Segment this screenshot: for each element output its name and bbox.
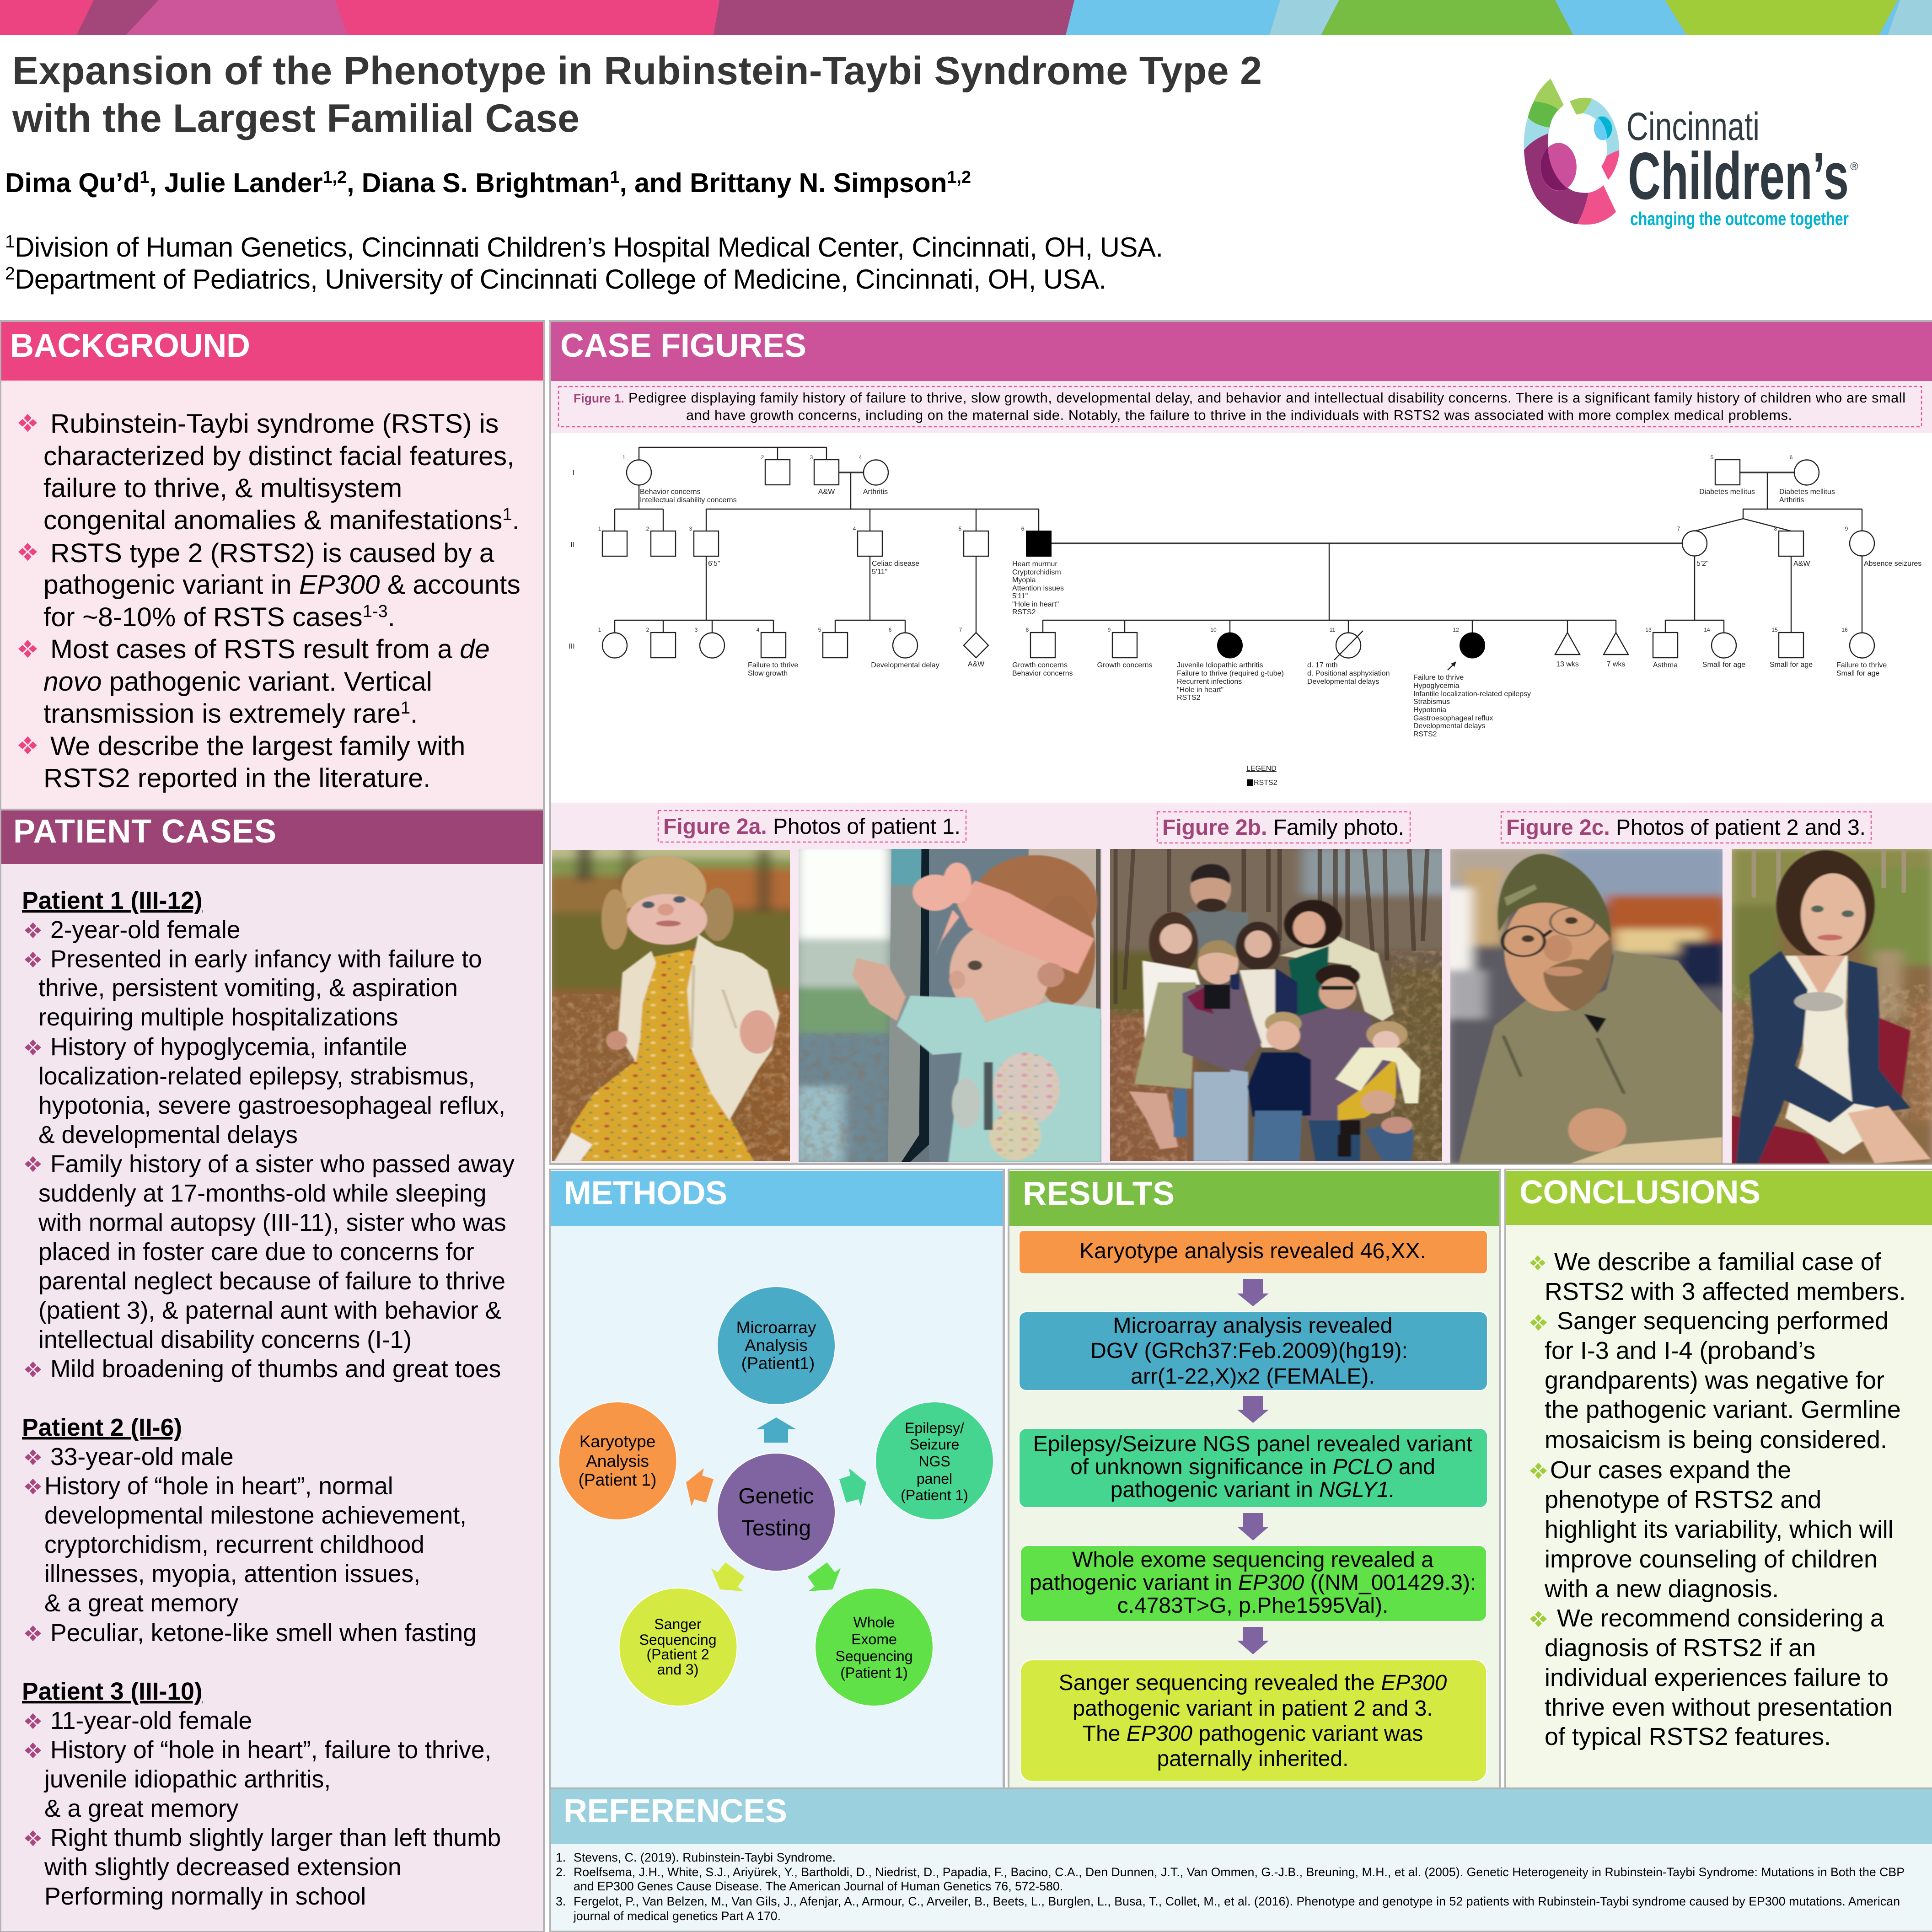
panel: methods xyxy=(549,1169,1005,1790)
result: karyotype: Karyotype analysis revealed 46,XX. xyxy=(1079,1239,1426,1263)
pedigree labels generations I and II: Behavior concerns xyxy=(640,488,701,496)
pedigree labels generation III: Gastroesophageal reflux xyxy=(1413,714,1493,722)
photo: man with green hat xyxy=(1445,847,1732,1166)
conclusions text xyxy=(1544,1248,1906,1750)
authors: , Diana S. Brightman xyxy=(347,168,610,198)
conclusions text: RSTS2 with 3 affected members. xyxy=(1545,1278,1906,1305)
generation numerals and person numbers: 4 xyxy=(757,627,760,633)
arrow: to sanger xyxy=(711,1562,745,1591)
authors: , and Brittany N. Simpson xyxy=(619,168,947,198)
figure 2b caption: Figure 2b. xyxy=(1162,816,1267,840)
result: whole exome: c.4783T>G, p.Phe1595Val). xyxy=(1117,1594,1388,1618)
node: sanger xyxy=(619,1588,737,1706)
affiliations: Division of Human Genetics, Cincinnati Children’s Hospital Medical Center, Cincinnati, OH, USA. xyxy=(15,232,1163,263)
pedigree labels generations I and II: Arthritis xyxy=(863,488,888,496)
patient 2 text: illnesses, myopia, attention issues, xyxy=(44,1561,420,1588)
generation numerals and person numbers: II xyxy=(571,541,574,549)
pedigree labels generations I and II: Myopia xyxy=(1012,576,1036,584)
reference list: 2. xyxy=(556,1865,566,1879)
title: Expansion of the Phenotype in Rubinstein-Taybi Syndrome Type 2 xyxy=(12,49,1262,93)
pedigree labels generation III: 13 wks xyxy=(1556,660,1579,668)
generation numerals and person numbers: 6 xyxy=(889,627,892,633)
pedigree labels generations I and II: Intellectual disability concerns xyxy=(640,496,737,504)
authors: 1 xyxy=(140,168,149,187)
patient 1 text: 2-year-old female xyxy=(50,917,240,944)
node: sanger: and 3) xyxy=(657,1661,698,1678)
pedigree labels generations I and II: A&W xyxy=(818,488,835,496)
generation numerals and person numbers: 9 xyxy=(1108,627,1111,633)
pedigree labels generation III: Slow growth xyxy=(748,670,788,677)
patient 2 text: & a great memory xyxy=(44,1590,239,1617)
patient 1 text: (patient 3), & paternal aunt with behavior & xyxy=(38,1297,501,1324)
panel: background xyxy=(0,320,545,810)
pedigree labels generation III: Failure to thrive xyxy=(748,661,798,669)
background text: 1 xyxy=(502,505,512,524)
generation numerals and person numbers: 3 xyxy=(695,627,698,633)
patient 1 text: parental neglect because of failure to thrive xyxy=(38,1268,505,1295)
figure 1 caption: Pedigree displaying family history of failure to thrive, slow growth, developmental delay, and behavior and intellectual disability concerns. There is a significant family history of children who are small xyxy=(628,390,1905,406)
patient 3 text: & a great memory xyxy=(44,1795,239,1822)
pedigree labels generation III: Juvenile Idiopathic arthritis xyxy=(1177,661,1263,669)
pedigree labels generations I and II: RSTS2 xyxy=(1012,608,1036,616)
generation numerals and person numbers: 7 xyxy=(959,627,962,633)
patient 2 text: Peculiar, ketone-like smell when fasting xyxy=(50,1620,477,1647)
conclusions text: improve counseling of children xyxy=(1545,1546,1878,1573)
node: epilepsy panel: NGS xyxy=(918,1453,950,1470)
conclusions text: diagnosis of RSTS2 if an xyxy=(1545,1634,1816,1662)
generation numerals and person numbers: 11 xyxy=(1330,627,1336,633)
patient 2 text: 33-year-old male xyxy=(50,1444,234,1470)
pedigree labels generation III: Small for age xyxy=(1702,661,1745,669)
pedigree labels generation III: Strabismus xyxy=(1413,698,1450,706)
logo: Cincinnati Children's: Cincinnati xyxy=(1626,105,1760,149)
arrow xyxy=(1237,1279,1269,1306)
generation numerals and person numbers: 2 xyxy=(646,526,649,532)
title: with the Largest Familial Case xyxy=(12,97,580,140)
node: epilepsy panel: Seizure xyxy=(910,1436,959,1453)
generation numerals and person numbers: 9 xyxy=(1845,526,1848,532)
pedigree labels generation III: d. 17 mth xyxy=(1307,661,1338,669)
panel: conclusions xyxy=(1504,1169,1932,1790)
arrow xyxy=(1237,1396,1269,1423)
patient 1 text: Patient 1 (III-12) xyxy=(22,887,203,914)
figure 2b caption: Family photo. xyxy=(1273,816,1404,840)
result: epilepsy panel: Epilepsy/Seizure NGS panel revealed variant xyxy=(1033,1432,1472,1456)
genetic testing diagram xyxy=(559,1287,993,1706)
conclusions text: grandparents) was negative for xyxy=(1545,1367,1884,1394)
conclusions text: highlight its variability, which will xyxy=(1545,1516,1894,1543)
pedigree labels generations I and II: Absence seizures xyxy=(1864,560,1921,568)
pedigree labels generation III: Failure to thrive (required g-tube) xyxy=(1177,670,1284,677)
node: karyotype: (Patient 1) xyxy=(579,1470,656,1489)
patient 2 text: History of “hole in heart”, normal xyxy=(44,1473,393,1500)
generation numerals and person numbers xyxy=(569,454,1848,650)
generation numerals and person numbers: 7 xyxy=(1677,526,1680,532)
pedigree labels generation III: Behavior concerns xyxy=(1012,670,1073,677)
generation numerals and person numbers: 3 xyxy=(689,526,692,532)
pedigree labels generation III: Developmental delays xyxy=(1307,678,1379,686)
patient 1 text: intellectual disability concerns (I-1) xyxy=(38,1326,412,1353)
generation numerals and person numbers: III xyxy=(569,643,575,650)
node: microarray: (Patient1) xyxy=(741,1354,815,1373)
pedigree labels generations I and II: Attention issues xyxy=(1012,585,1064,592)
arrow: to karyotype xyxy=(686,1468,714,1506)
logo: Cincinnati Children's xyxy=(1524,79,1858,229)
generation numerals and person numbers: 4 xyxy=(859,454,862,461)
reference list: journal of medical genetics Part A 170. xyxy=(573,1909,781,1923)
heading: conclusions: CONCLUSIONS xyxy=(1519,1174,1760,1211)
patient 2 text: Patient 2 (II-6) xyxy=(22,1414,182,1441)
authors: 1,2 xyxy=(947,168,971,187)
pedigree labels generation III: Hypotonia xyxy=(1413,706,1446,714)
conclusions text: Our cases expand the xyxy=(1550,1456,1791,1484)
pedigree labels generation III: A&W xyxy=(968,660,985,668)
conclusion bullets xyxy=(1530,1256,1547,1627)
figure 2a caption xyxy=(658,810,966,842)
pedigree legend: RSTS2 xyxy=(1254,779,1277,787)
node: sanger: (Patient 2 xyxy=(647,1646,709,1663)
patient 3 text: Right thumb slightly larger than left thumb xyxy=(50,1825,501,1852)
arrow xyxy=(1237,1627,1269,1654)
generation numerals and person numbers: 6 xyxy=(1021,526,1025,532)
figure 2c caption xyxy=(1501,812,1871,843)
background text: characterized by distinct facial features, xyxy=(43,441,514,471)
affiliations: Department of Pediatrics, University of Cincinnati College of Medicine, Cincinnati, OH, USA. xyxy=(15,264,1106,295)
patient 3 text: Performing normally in school xyxy=(44,1883,366,1910)
patient 1 text: Family history of a sister who passed away xyxy=(50,1151,515,1178)
background text: . xyxy=(388,602,395,632)
generation numerals and person numbers: 15 xyxy=(1771,627,1778,633)
heading: case figures: CASE FIGURES xyxy=(560,327,806,364)
reference list xyxy=(556,1851,1905,1923)
patient 1 text: placed in foster care due to concerns for xyxy=(38,1239,474,1266)
generation III symbols xyxy=(602,631,1874,670)
patient 2 text: cryptorchidism, recurrent childhood xyxy=(44,1531,424,1558)
background text: 1 xyxy=(401,698,410,718)
photo: toddler at window xyxy=(794,844,1106,1164)
result: epilepsy panel xyxy=(1019,1428,1487,1508)
conclusions text: We recommend considering a xyxy=(1557,1605,1884,1632)
result: sanger: The EP300 pathogenic variant was xyxy=(1083,1722,1423,1746)
heading: methods xyxy=(551,1171,1003,1226)
generation numerals and person numbers: 4 xyxy=(853,526,856,532)
pedigree labels generation III: "Hole in heart" xyxy=(1177,686,1224,694)
patient 3 text xyxy=(22,1678,501,1910)
conclusions text: of typical RSTS2 features. xyxy=(1545,1723,1831,1750)
pedigree labels generations I and II: Diabetes mellitus xyxy=(1699,488,1755,496)
patient 3 text: 11-year-old female xyxy=(50,1707,252,1734)
node: microarray: Analysis xyxy=(745,1336,808,1355)
affiliations xyxy=(5,232,1163,295)
background text: congenital anomalies & manifestations xyxy=(43,505,502,535)
result: epilepsy panel: of unknown significance in PCLO and xyxy=(1070,1455,1435,1479)
figure 2b caption xyxy=(1157,812,1410,843)
generation numerals and person numbers: 16 xyxy=(1841,627,1848,633)
figure 1 caption: Figure 1. xyxy=(574,392,624,405)
background text: transmission is extremely rare xyxy=(43,699,401,729)
result: sanger xyxy=(1020,1660,1487,1782)
heading: references xyxy=(551,1789,1932,1844)
pedigree legend xyxy=(1246,765,1277,787)
conclusions text: for I-3 and I-4 (proband’s xyxy=(1545,1337,1815,1364)
figure 1 caption xyxy=(558,386,1921,427)
pedigree labels generation III: Asthma xyxy=(1653,661,1678,669)
patient 1 text xyxy=(22,887,515,1383)
generation numerals and person numbers: 1 xyxy=(598,526,601,532)
generation numerals and person numbers: 1 xyxy=(598,627,601,633)
heading: references: REFERENCES xyxy=(564,1793,787,1830)
generation numerals and person numbers: 8 xyxy=(1026,627,1029,633)
node: genetic testing: Testing xyxy=(741,1516,811,1540)
node: whole exome: (Patient 1) xyxy=(840,1664,908,1681)
node: whole exome: Exome xyxy=(851,1631,897,1648)
reference list: Stevens, C. (2019). Rubinstein-Taybi Syndrome. xyxy=(574,1851,836,1864)
patient 1 text: Mild broadening of thumbs and great toes xyxy=(50,1356,501,1383)
pedigree labels generations I and II: "Hole in heart" xyxy=(1012,601,1059,608)
result: whole exome xyxy=(1020,1546,1487,1621)
node: whole exome xyxy=(815,1588,933,1706)
pedigree labels generation III: 7 wks xyxy=(1607,660,1625,668)
conclusions text: phenotype of RSTS2 and xyxy=(1545,1486,1821,1513)
pedigree labels generations I and II: Celiac disease xyxy=(872,560,919,568)
patient 1 text: with normal autopsy (III-11), sister who was xyxy=(38,1209,506,1236)
result: microarray: DGV (GRch37:Feb.2009)(hg19): xyxy=(1090,1339,1408,1363)
pedigree labels generation III: Small for age xyxy=(1770,661,1813,669)
generation numerals and person numbers: 14 xyxy=(1704,627,1710,633)
pedigree labels generation III: Recurrent infections xyxy=(1177,678,1242,686)
pedigree labels generation III: Small for age xyxy=(1836,670,1879,677)
result: whole exome: Whole exome sequencing revealed a xyxy=(1072,1548,1433,1572)
pedigree labels generation III: Growth concerns xyxy=(1012,661,1068,669)
background text: novo pathogenic variant. Vertical xyxy=(43,667,432,697)
pedigree labels generations I and II: Cryptorchidism xyxy=(1012,569,1061,576)
pedigree labels generations I and II: Heart murmur xyxy=(1012,560,1057,568)
heading: patient cases xyxy=(1,810,543,864)
pedigree labels generation III: RSTS2 xyxy=(1413,730,1437,738)
node: microarray xyxy=(717,1287,835,1405)
photo: family xyxy=(1110,849,1442,1161)
pedigree labels generation III xyxy=(748,660,1887,738)
affiliations: 2 xyxy=(5,264,15,284)
pedigree labels generations I and II: 6'5" xyxy=(708,560,720,568)
pedigree labels generation III: Infantile localization-related epilepsy xyxy=(1413,690,1531,698)
pedigree labels generation III: Failure to thrive xyxy=(1413,674,1464,682)
generation II symbols xyxy=(602,531,1874,556)
pedigree labels generation III: RSTS2 xyxy=(1177,694,1201,702)
arrow: to whole exome xyxy=(808,1562,841,1591)
patient 3 text: with slightly decreased extension xyxy=(44,1854,402,1881)
result: microarray: arr(1-22,X)x2 (FEMALE). xyxy=(1131,1364,1375,1389)
pedigree labels generation III: Developmental delay xyxy=(871,661,939,669)
node: epilepsy panel: panel xyxy=(917,1470,952,1487)
pedigree legend: LEGEND xyxy=(1246,765,1277,773)
background text: . xyxy=(512,505,520,535)
top colour band xyxy=(0,0,1932,35)
patient bullets xyxy=(25,923,41,1846)
patient 2 text xyxy=(22,1414,477,1647)
background text: RSTS2 reported in the literature. xyxy=(43,763,430,793)
node: sanger: Sequencing xyxy=(639,1631,717,1648)
patient 1 text: thrive, persistent vomiting, & aspiration xyxy=(38,975,458,1002)
result: microarray: Microarray analysis revealed xyxy=(1113,1314,1392,1338)
generation I symbols xyxy=(627,460,1819,485)
generation numerals and person numbers: 10 xyxy=(1210,627,1217,633)
patient 1 text: Presented in early infancy with failure to xyxy=(50,946,482,973)
figure 2a caption: Photos of patient 1. xyxy=(773,815,961,839)
pedigree connecting lines xyxy=(615,447,1862,633)
generation numerals and person numbers: 5 xyxy=(818,627,821,633)
panel: results xyxy=(1008,1169,1501,1790)
heading: conclusions xyxy=(1506,1171,1932,1225)
figure 2a caption: Figure 2a. xyxy=(663,815,767,839)
heading: background xyxy=(1,322,543,381)
reference list: 1. xyxy=(556,1851,566,1864)
heading: background: BACKGROUND xyxy=(10,327,250,364)
generation numerals and person numbers: 3 xyxy=(810,454,813,461)
patient 3 text: History of “hole in heart”, failure to thrive, xyxy=(50,1737,491,1764)
result: sanger: pathogenic variant in patient 2 and 3. xyxy=(1073,1696,1433,1721)
node: sanger: Sanger xyxy=(654,1616,702,1632)
result: karyotype xyxy=(1019,1230,1487,1274)
generation numerals and person numbers: 12 xyxy=(1453,627,1459,633)
patient 1 text: & developmental delays xyxy=(38,1122,298,1148)
title xyxy=(12,49,1262,140)
pedigree labels generation III: Developmental delays xyxy=(1413,722,1485,730)
background text: for ~8-10% of RSTS cases xyxy=(43,602,363,632)
background text: failure to thrive, & multisystem xyxy=(43,473,402,503)
figure 2c caption: Photos of patient 2 and 3. xyxy=(1616,816,1866,840)
conclusions text: the pathogenic variant. Germline xyxy=(1545,1396,1901,1423)
photo: girl in yellow dress xyxy=(552,850,790,1161)
node: epilepsy panel: (Patient 1) xyxy=(901,1487,968,1503)
node: epilepsy panel xyxy=(875,1402,993,1520)
node: karyotype: Karyotype xyxy=(580,1432,655,1451)
logo: Cincinnati Children's: ® xyxy=(1850,161,1858,173)
affiliations: 1 xyxy=(5,232,15,252)
pedigree labels generations I and II xyxy=(640,488,1921,616)
conclusions text: thrive even without presentation xyxy=(1545,1694,1893,1721)
pedigree chart xyxy=(551,433,1932,803)
reference list: Fergelot, P., Van Belzen, M., Van Gils, J., Afenjar, A., Armour, C., Arveiler, B., Beets, L., Burglen, L., Busa, T., Collet, M., et al. (2016). Phenotype and genotype in 52 patients with Rubinstein-Taybi syndrome caused by EP300 mutations. American xyxy=(574,1894,1900,1908)
pedigree labels generations I and II: 5'11" xyxy=(1012,592,1028,600)
pedigree labels generation III: Failure to thrive xyxy=(1836,661,1887,669)
patient 3 text: Patient 3 (III-10) xyxy=(22,1678,203,1705)
generation numerals and person numbers: 5 xyxy=(1711,454,1714,461)
node: genetic testing xyxy=(717,1453,835,1571)
generation numerals and person numbers: 2 xyxy=(646,627,649,633)
background text: Rubinstein-Taybi syndrome (RSTS) is xyxy=(50,409,499,439)
background text: Most cases of RSTS result from a de xyxy=(50,634,490,664)
arrow: to microarray xyxy=(756,1417,796,1443)
arrow: to epilepsy panel xyxy=(839,1468,866,1506)
authors: 1,2 xyxy=(323,168,347,187)
node: epilepsy panel: Epilepsy/ xyxy=(905,1420,964,1436)
patient 1 text: requiring multiple hospitalizations xyxy=(38,1004,398,1031)
node: karyotype: Analysis xyxy=(586,1452,649,1470)
background text: 1-3 xyxy=(363,602,388,621)
background text: . xyxy=(410,699,418,729)
authors: , Julie Lander xyxy=(149,168,323,198)
node: microarray: Microarray xyxy=(736,1318,816,1337)
node: genetic testing: Genetic xyxy=(738,1484,814,1508)
photo: girl in navy cardigan xyxy=(1727,847,1932,1166)
result: whole exome: pathogenic variant in EP300 ((NM_001429.3): xyxy=(1030,1571,1476,1595)
generation numerals and person numbers: 1 xyxy=(623,454,626,461)
pedigree labels generation III: Hypoglycemia xyxy=(1413,682,1460,690)
figure 1 caption: and have growth concerns, including on the maternal side. Notably, the failure to thrive in the individuals with RSTS2 was associated with more complex medical problems. xyxy=(686,408,1792,423)
heading: results: RESULTS xyxy=(1023,1175,1175,1212)
conclusions text: We describe a familial case of xyxy=(1554,1248,1882,1276)
result: sanger: paternally inherited. xyxy=(1157,1747,1348,1771)
panel: patient cases xyxy=(0,809,545,1932)
heading: case figures xyxy=(551,322,1932,381)
heading: results xyxy=(1009,1171,1499,1226)
panel: case figures xyxy=(544,320,1932,1166)
patient 3 text: juvenile idiopathic arthritis, xyxy=(43,1766,331,1793)
background bullets xyxy=(18,414,37,754)
result: microarray xyxy=(1019,1312,1487,1390)
background text: We describe the largest family with xyxy=(50,731,465,761)
pedigree labels generations I and II: Diabetes mellitus xyxy=(1779,488,1835,496)
heading: methods: METHODS xyxy=(564,1175,727,1212)
generation numerals and person numbers: 6 xyxy=(1790,454,1793,461)
conclusions text: Sanger sequencing performed xyxy=(1557,1307,1889,1335)
pedigree labels generations I and II: 5'2" xyxy=(1696,560,1709,568)
node: whole exome: Sequencing xyxy=(835,1648,913,1664)
node: karyotype xyxy=(559,1402,677,1520)
pedigree labels generations I and II: 5'11" xyxy=(872,568,887,576)
patient 1 text: hypotonia, severe gastroesophageal reflux, xyxy=(38,1092,505,1119)
conclusions text: mosaicism is being considered. xyxy=(1545,1426,1887,1454)
authors: 1 xyxy=(610,168,620,187)
reference list: and EP300 Genes Cause Disease. The American Journal of Human Genetics 76, 572-580. xyxy=(574,1879,1063,1893)
background text: pathogenic variant in EP300 & accounts xyxy=(43,570,521,600)
generation numerals and person numbers: 2 xyxy=(761,454,764,461)
result: sanger: Sanger sequencing revealed the EP300 xyxy=(1059,1671,1447,1695)
pedigree labels generation III: Growth concerns xyxy=(1097,661,1152,669)
generation numerals and person numbers: 13 xyxy=(1645,627,1652,633)
generation numerals and person numbers: I xyxy=(573,469,574,477)
generation numerals and person numbers: 5 xyxy=(959,526,962,532)
heading: patient cases: PATIENT CASES xyxy=(13,813,276,850)
pedigree labels generation III: d. Positional asphyxiation xyxy=(1307,670,1390,677)
panel: references xyxy=(549,1787,1932,1932)
background text: RSTS type 2 (RSTS2) is caused by a xyxy=(50,538,494,568)
generation numerals and person numbers: 8 xyxy=(1774,526,1777,532)
authors: Dima Qu’d xyxy=(5,168,140,198)
conclusions text: with a new diagnosis. xyxy=(1544,1575,1779,1603)
background text xyxy=(43,409,521,793)
node: whole exome: Whole xyxy=(853,1614,895,1631)
conclusions text: individual experiences failure to xyxy=(1545,1664,1889,1691)
pedigree labels generations I and II: A&W xyxy=(1793,560,1810,568)
reference list: 3. xyxy=(556,1894,566,1908)
patient 1 text: suddenly at 17-months-old while sleeping xyxy=(38,1180,486,1207)
logo: Cincinnati Children's: changing the outcome together xyxy=(1630,208,1849,229)
figure 2c caption: Figure 2c. xyxy=(1506,816,1610,840)
patient 1 text: History of hypoglycemia, infantile xyxy=(50,1034,407,1061)
arrow xyxy=(1237,1513,1269,1540)
reference list: Roelfsema, J.H., White, S.J., Ariyürek, Y., Bartholdi, D., Niedrist, D., Papadia, F., Bacino, C.A., Den Dunnen, J.T., Van Ommen, G.-J.B., Breuning, M.H., et al. (2005). Genetic Heterogeneity in Rubinstein-Taybi Syndrome: Mutations in Both the CBP xyxy=(574,1865,1905,1879)
patient 2 text: developmental milestone achievement, xyxy=(44,1502,467,1529)
result: epilepsy panel: pathogenic variant in NGLY1. xyxy=(1111,1478,1395,1502)
pedigree labels generations I and II: Arthritis xyxy=(1779,496,1804,504)
patient 1 text: localization-related epilepsy, strabismus, xyxy=(38,1063,475,1090)
